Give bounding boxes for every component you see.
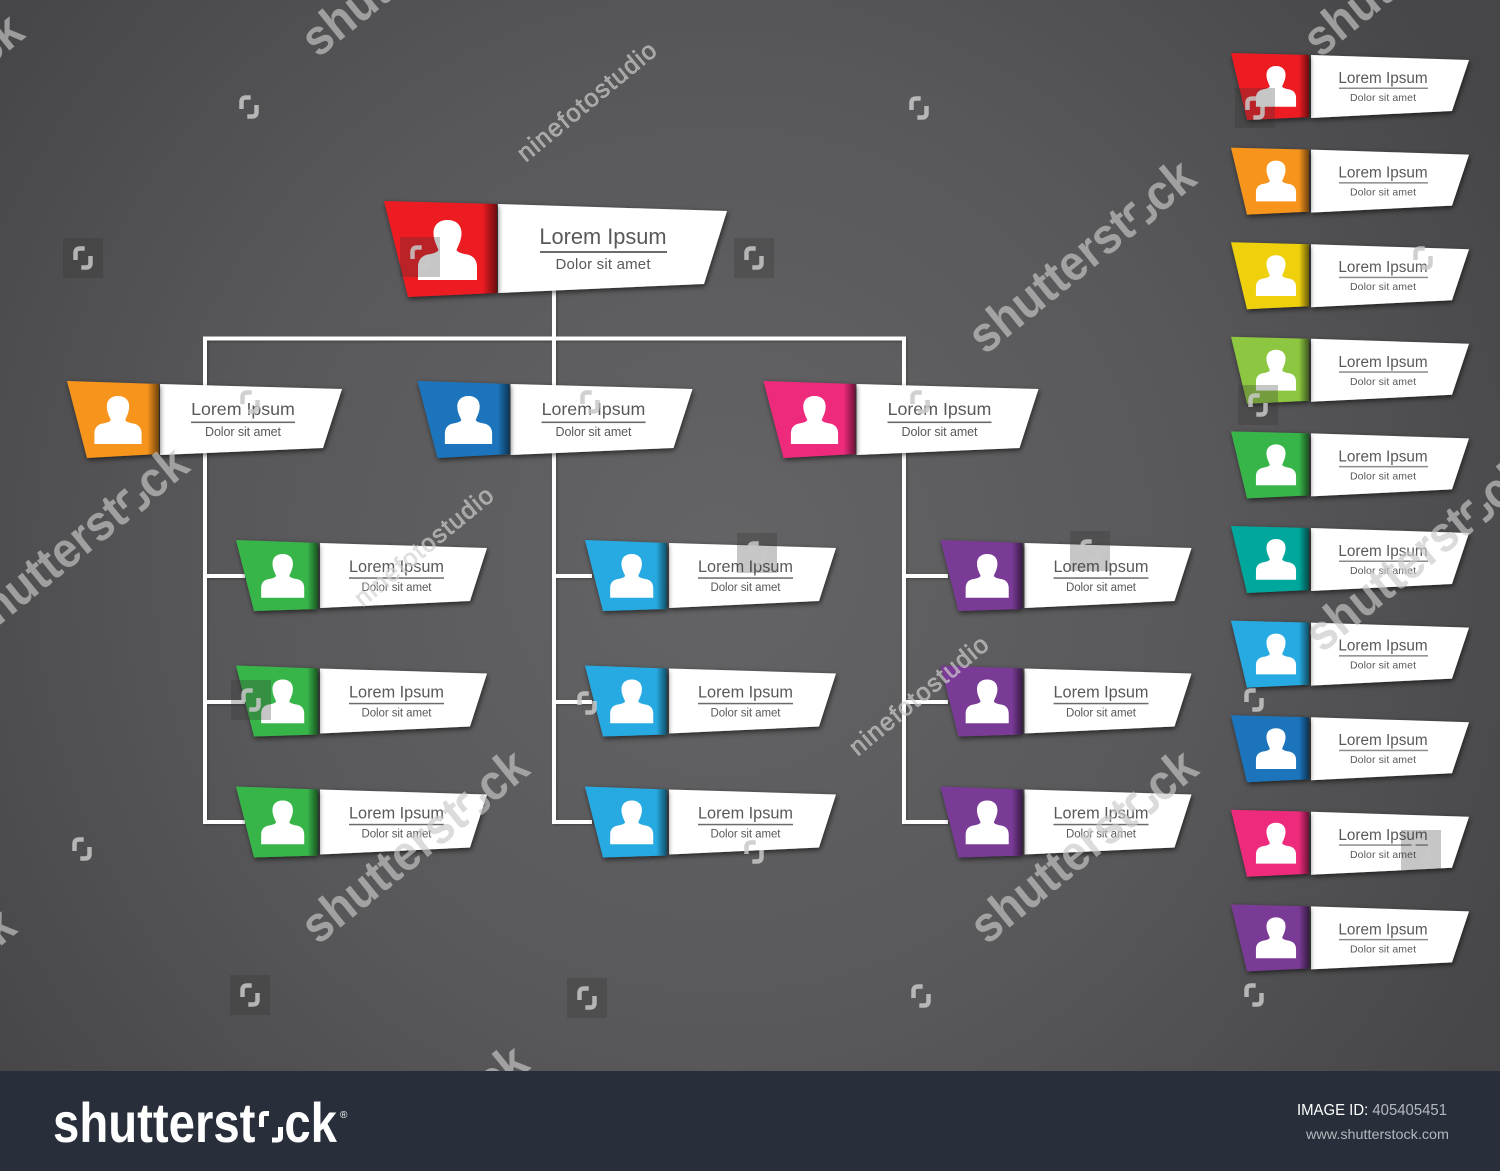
card: purple 2: Lorem Ipsum bbox=[1053, 684, 1149, 702]
legend card: blue: Dolor sit amet bbox=[1350, 754, 1416, 766]
watermark overlay: ninefotostudio bbox=[844, 630, 994, 761]
footer bar bbox=[0, 1071, 1500, 1171]
card: green 3: Dolor sit amet bbox=[362, 828, 432, 840]
card: level 2 pink: Dolor sit amet bbox=[902, 425, 978, 439]
legend card: green: Dolor sit amet bbox=[1350, 470, 1416, 482]
legend card: lime bbox=[1231, 337, 1469, 404]
card: level 2 orange: Dolor sit amet bbox=[205, 425, 282, 439]
legend card: sky: Lorem Ipsum bbox=[1338, 638, 1428, 655]
card: purple 1: Dolor sit amet bbox=[1066, 582, 1137, 594]
legend card: sky: Dolor sit amet bbox=[1350, 660, 1416, 672]
card: sky 3 bbox=[585, 786, 836, 858]
image id: IMAGE ID: 405405451 bbox=[1297, 1102, 1447, 1119]
card: level 2 pink bbox=[764, 381, 1038, 458]
legend card: blue: Lorem Ipsum bbox=[1338, 732, 1428, 749]
legend card: purple: Lorem Ipsum bbox=[1338, 921, 1428, 938]
watermark overlay: shutterstock bbox=[290, 737, 539, 954]
watermark overlay: ninefotostudio bbox=[512, 36, 662, 167]
card: purple 3: Lorem Ipsum bbox=[1053, 804, 1149, 822]
card: green 3: Lorem Ipsum bbox=[349, 804, 444, 822]
card: green 1 bbox=[236, 540, 487, 611]
legend card: orange: Dolor sit amet bbox=[1350, 187, 1416, 199]
legend card: purple: Dolor sit amet bbox=[1350, 943, 1416, 955]
card: green 2 bbox=[236, 666, 487, 736]
card: sky 3: Lorem Ipsum bbox=[698, 804, 793, 822]
card: level 2 orange: Lorem Ipsum bbox=[191, 399, 295, 419]
root card bbox=[384, 201, 727, 297]
watermark overlay: shutterstock bbox=[957, 147, 1206, 364]
card: level 2 blue bbox=[418, 381, 692, 458]
card: sky 1 bbox=[585, 540, 836, 611]
card: green 2: Lorem Ipsum bbox=[349, 684, 444, 702]
legend card: sky bbox=[1231, 621, 1469, 688]
watermark overlay: shutterstock bbox=[959, 737, 1208, 954]
card: green 2: Dolor sit amet bbox=[362, 708, 432, 720]
card: green 3 bbox=[236, 786, 487, 858]
watermark overlay: ck bbox=[464, 1033, 539, 1109]
connector lines bbox=[205, 290, 948, 822]
legend card: red: Dolor sit amet bbox=[1350, 92, 1416, 104]
watermark overlay: ninefotostudio bbox=[349, 481, 499, 612]
card: purple 3 bbox=[940, 786, 1192, 858]
card: sky 1: Dolor sit amet bbox=[710, 582, 781, 594]
legend card: pink: Dolor sit amet bbox=[1350, 849, 1416, 861]
legend card: blue bbox=[1231, 715, 1469, 782]
root card: Lorem Ipsum bbox=[539, 224, 667, 249]
card: sky 2: Dolor sit amet bbox=[710, 708, 781, 720]
legend card: pink bbox=[1231, 810, 1469, 877]
card: purple 2: Dolor sit amet bbox=[1066, 708, 1137, 720]
legend card: teal bbox=[1231, 526, 1469, 593]
card: sky 1: Lorem Ipsum bbox=[698, 558, 793, 576]
card: sky 3: Dolor sit amet bbox=[710, 828, 781, 840]
legend card: teal: Dolor sit amet bbox=[1350, 565, 1416, 577]
legend card: pink: Lorem Ipsum bbox=[1338, 827, 1428, 844]
card: sky 2 bbox=[585, 666, 836, 736]
legend card: lime: Lorem Ipsum bbox=[1338, 354, 1428, 371]
card: purple 1: Lorem Ipsum bbox=[1053, 558, 1149, 576]
card: green 1: Lorem Ipsum bbox=[349, 558, 444, 576]
legend card: yellow: Lorem Ipsum bbox=[1338, 259, 1428, 276]
card: purple 1 bbox=[940, 540, 1192, 611]
legend card: green bbox=[1231, 431, 1469, 498]
legend card: yellow: Dolor sit amet bbox=[1350, 281, 1416, 293]
legend card: red: Lorem Ipsum bbox=[1338, 70, 1428, 87]
card: green 1: Dolor sit amet bbox=[362, 582, 432, 594]
legend card: purple bbox=[1231, 904, 1469, 971]
legend card: teal: Lorem Ipsum bbox=[1338, 543, 1428, 560]
legend card: red bbox=[1231, 53, 1469, 120]
legend card: green: Lorem Ipsum bbox=[1338, 448, 1428, 465]
card: purple 3: Dolor sit amet bbox=[1066, 828, 1137, 840]
card: level 2 blue: Dolor sit amet bbox=[556, 425, 632, 439]
footer logo: shutterstock bbox=[53, 1091, 338, 1154]
root card: Dolor sit amet bbox=[556, 256, 651, 273]
legend card: lime: Dolor sit amet bbox=[1350, 376, 1416, 388]
card: sky 2: Lorem Ipsum bbox=[698, 684, 793, 702]
footer logo: ® bbox=[340, 1110, 348, 1121]
card: purple 2 bbox=[940, 666, 1192, 736]
card: level 2 pink: Lorem Ipsum bbox=[888, 399, 991, 419]
website: www.shutterstock.com bbox=[1305, 1126, 1449, 1142]
legend card: orange: Lorem Ipsum bbox=[1338, 165, 1428, 182]
card: level 2 orange bbox=[67, 381, 342, 458]
card: level 2 blue: Lorem Ipsum bbox=[542, 399, 645, 419]
legend card: orange bbox=[1231, 148, 1469, 215]
legend card: yellow bbox=[1231, 242, 1469, 309]
